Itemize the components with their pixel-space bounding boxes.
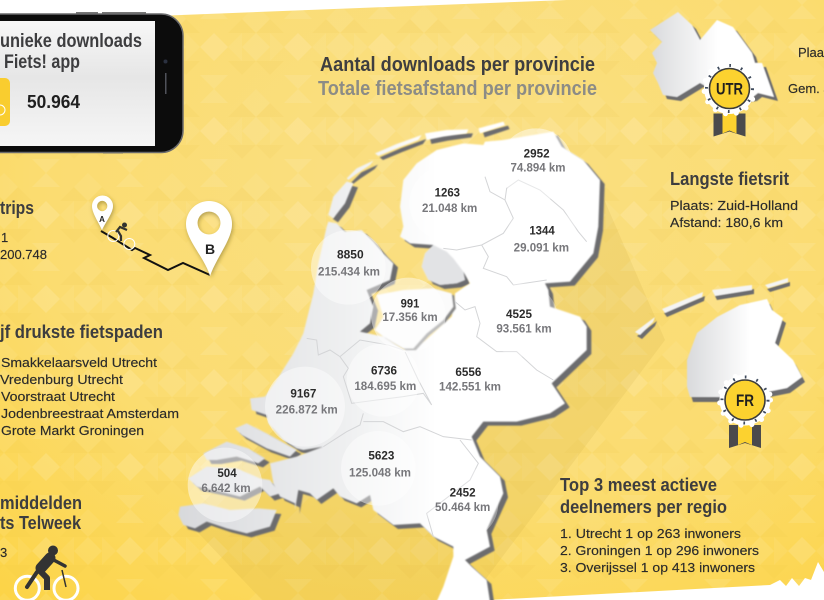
- province: Utrecht figures: [354, 364, 416, 393]
- Friesland province shape: [687, 299, 805, 403]
- title: Totale fietsafstand per provincie: [318, 78, 597, 100]
- province: Zuid-Holland figures: 9167: [290, 386, 317, 400]
- route with pins and cyclist: [92, 196, 232, 276]
- province: Zuid-Holland figures: [276, 386, 338, 417]
- busiest cycle paths list: Vredenburg Utrecht: [0, 372, 123, 387]
- top 3 active participants: 3. Overijssel 1 op 413 inwoners: [560, 560, 756, 575]
- Utrecht stats: [788, 45, 824, 96]
- map of the Netherlands: [178, 122, 605, 600]
- province: Gelderland figures: [439, 365, 501, 393]
- province: Overijssel figures: 4525: [506, 307, 532, 321]
- panel: Friesland badge: [635, 278, 805, 448]
- province: Drenthe figures: 29.091 km: [514, 240, 569, 254]
- province: Friesland figures: 1263: [435, 185, 460, 199]
- longest ride text block: Plaats: Zuid-Holland: [670, 198, 798, 213]
- province: Flevoland figures: [382, 297, 438, 324]
- province: Friesland figures: [422, 185, 477, 215]
- province: Limburg figures: [435, 485, 490, 514]
- rosette FR: FR: [736, 391, 754, 410]
- panel: Utrecht badge: [650, 12, 824, 136]
- title: [318, 54, 597, 100]
- province: Limburg figures: 50.464 km: [435, 500, 490, 514]
- province: Zeeland figures: 504: [217, 466, 237, 480]
- map shadow: [183, 126, 605, 600]
- province: Noord-Holland figures: 215.434 km: [318, 264, 380, 278]
- province: Friesland figures: 21.048 km: [422, 201, 477, 215]
- province: Zeeland figures: [201, 466, 251, 495]
- Friesland islands: [635, 278, 790, 339]
- province: Overijssel figures: [496, 307, 552, 335]
- top 3 active participants: 1. Utrecht 1 op 263 inwoners: [560, 526, 742, 541]
- province: Flevoland figures: 17.356 km: [382, 310, 438, 324]
- trips text block: 200.748: [0, 247, 47, 262]
- title: Aantal downloads per provincie: [320, 54, 595, 76]
- longest ride text block: [670, 169, 798, 230]
- map land: [178, 122, 600, 600]
- top 3 active participants: 2. Groningen 1 op 296 inwoners: [560, 543, 760, 558]
- averages text block: ts Telweek: [0, 513, 82, 533]
- icon: pin A: A: [99, 215, 105, 224]
- longest ride text block: Langste fietsrit: [670, 169, 789, 189]
- icon: cyclist: [15, 546, 78, 600]
- busiest cycle paths list: Jodenbreestraat Amsterdam: [1, 406, 179, 421]
- busiest cycle paths list: [0, 322, 179, 438]
- province: Gelderland figures: 6556: [455, 365, 482, 379]
- province: Overijssel figures: 93.561 km: [496, 321, 552, 335]
- icon: pin B: B: [205, 241, 215, 257]
- province: Noord-Brabant figures: 5623: [368, 449, 395, 463]
- busiest cycle paths list: jf drukste fietspaden: [0, 322, 163, 342]
- phone heading: unieke downloads: [0, 31, 142, 52]
- app icon: [0, 78, 10, 126]
- rosette UTR: [704, 63, 755, 136]
- province: Zuid-Holland figures: 226.872 km: [276, 403, 338, 417]
- trips text block: trips: [0, 198, 34, 218]
- province: Noord-Brabant figures: 125.048 km: [349, 465, 411, 479]
- top 3 active participants: [560, 475, 760, 575]
- province: Utrecht figures: 6736: [371, 364, 397, 378]
- province: Noord-Brabant figures: [349, 449, 411, 479]
- icon: small cyclist: [108, 222, 135, 250]
- Utrecht province shape: [650, 12, 778, 104]
- province: Groningen figures: 74.894 km: [510, 161, 565, 175]
- province borders: [307, 177, 587, 537]
- province: Limburg figures: 2452: [450, 485, 476, 499]
- province: Noord-Holland figures: [318, 248, 380, 278]
- top 3 active participants: Top 3 meest actieve: [560, 475, 717, 495]
- province: Groningen figures: 2952: [524, 147, 550, 161]
- rosette UTR: UTR: [716, 80, 743, 98]
- province: Groningen figures: [510, 147, 565, 175]
- province: Utrecht figures: 184.695 km: [354, 379, 416, 393]
- averages text block: 3: [0, 545, 7, 560]
- busiest cycle paths list: Voorstraat Utrecht: [1, 389, 115, 404]
- phone heading: Fiets! app: [4, 52, 80, 73]
- province: Noord-Holland figures: 8850: [337, 248, 364, 262]
- province: Drenthe figures: [514, 224, 569, 254]
- province: Drenthe figures: 1344: [529, 224, 555, 238]
- busiest cycle paths list: Grote Markt Groningen: [1, 423, 144, 438]
- long map shadow: [186, 190, 665, 600]
- province: Flevoland figures: 991: [401, 297, 420, 311]
- top 3 active participants: deelnemers per regio: [560, 497, 727, 517]
- province circles: [188, 128, 578, 540]
- province: Gelderland figures: 142.551 km: [439, 379, 501, 393]
- province: Zeeland figures: 6.642 km: [201, 481, 251, 495]
- rosette FR: [720, 374, 770, 448]
- trips text block: [0, 198, 47, 262]
- averages text block: [0, 493, 82, 560]
- longest ride text block: Afstand: 180,6 km: [670, 215, 783, 230]
- download count: 50.964: [27, 92, 80, 112]
- busiest cycle paths list: Smakkelaarsveld Utrecht: [1, 355, 157, 370]
- trips text block: 1: [1, 230, 8, 245]
- phone heading: [0, 31, 142, 73]
- phone with app downloads: [0, 12, 183, 154]
- averages text block: middelden: [0, 493, 82, 513]
